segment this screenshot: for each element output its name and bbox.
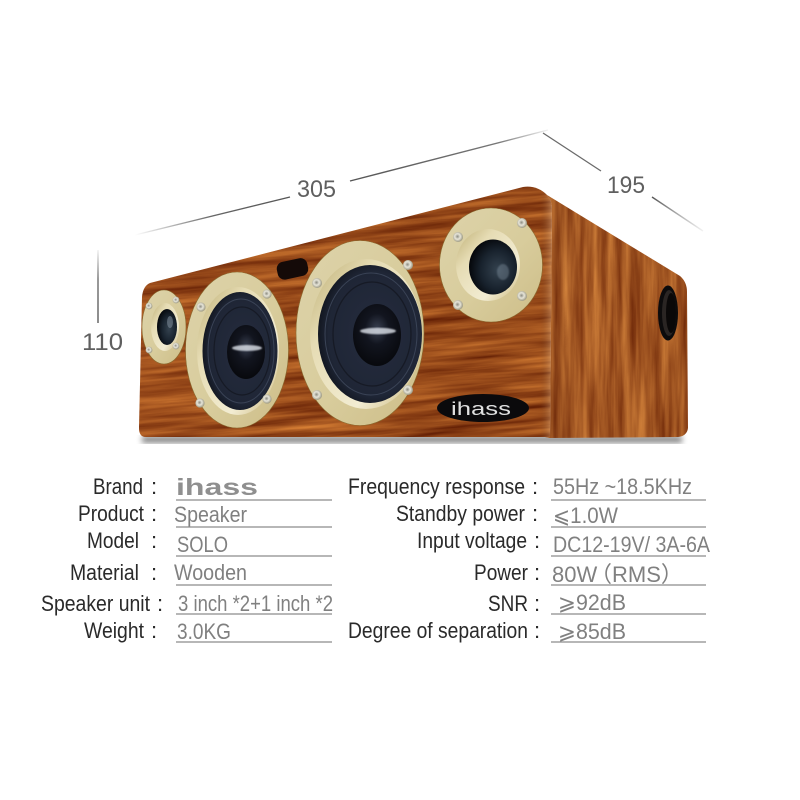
spec: frequency response (348, 474, 706, 500)
spec: power: : (534, 560, 540, 585)
dimension: height 110: 110 (82, 329, 123, 356)
spec: product: Speaker (174, 502, 247, 527)
spec: material: Material (70, 560, 139, 585)
dimension: depth 195: 195 (607, 172, 645, 199)
spec: standby power: ⩽1.0W (553, 503, 618, 528)
spec: input voltage: Input voltage (417, 528, 527, 553)
spec: product: Product (78, 501, 144, 526)
floor shadow (142, 436, 682, 443)
spec table: left column (41, 474, 333, 644)
spec: speaker unit: 3 inch *2+1 inch *2 (178, 591, 333, 616)
front slot (275, 257, 310, 281)
spec: weight (84, 618, 332, 644)
spec: product: : (151, 501, 157, 526)
cabinet front panel (139, 186, 552, 437)
ihass badge: ihass (451, 399, 511, 419)
spec: material (70, 560, 332, 585)
spec: product (78, 501, 332, 527)
left mid-range driver (186, 272, 288, 428)
spec: power (474, 560, 706, 587)
spec: frequency response: 55Hz ~18.5KHz (553, 474, 692, 499)
spec: brand: ihass (176, 474, 258, 500)
small left tweeter (142, 290, 186, 364)
spec: SNR: SNR (488, 591, 528, 616)
spec: standby power: Standby power (396, 501, 525, 526)
spec: SNR: ⩾92dB (558, 590, 626, 615)
spec: degree of separation (348, 618, 706, 644)
dimension: depth 195 (543, 133, 703, 231)
spec: input voltage (417, 528, 710, 557)
spec: input voltage: DC12-19V/ 3A-6A (553, 532, 710, 557)
spec: standby power: : (532, 501, 538, 526)
spec: speaker unit: : (157, 591, 163, 616)
spec: weight: Weight (84, 618, 144, 643)
spec: model: Model (87, 528, 139, 553)
spec: SNR (488, 590, 706, 616)
right tweeter (440, 208, 542, 322)
speaker photo illustration (138, 186, 688, 444)
spec: model: : (151, 528, 157, 553)
center mid-range driver (296, 240, 424, 426)
spec: weight: 3.0KG (177, 619, 231, 644)
dimension: height 110 (82, 250, 123, 356)
spec: model: SOLO (177, 532, 228, 557)
spec: power: （RMS） (590, 562, 683, 587)
spec: material: Wooden (174, 560, 247, 585)
spec: frequency response: Frequency response (348, 474, 525, 499)
spec: SNR: : (534, 591, 540, 616)
spec table: right column (348, 474, 710, 644)
spec: standby power (396, 501, 706, 528)
cabinet side panel (545, 195, 688, 438)
dimension: width 305 (135, 130, 548, 235)
spec: model (87, 528, 332, 557)
spec: input voltage: : (534, 528, 540, 553)
spec: frequency response: : (532, 474, 538, 499)
spec: brand: Brand (93, 474, 143, 499)
spec: degree of separation: ⩾85dB (558, 619, 626, 644)
spec: brand: : (151, 474, 157, 499)
dimension: width 305: 305 (297, 176, 336, 203)
spec: degree of separation: : (534, 618, 540, 643)
spec: power: Power (474, 560, 528, 585)
spec: degree of separation: Degree of separation (348, 618, 528, 643)
spec: weight: : (151, 618, 157, 643)
spec: speaker unit: Speaker unit (41, 591, 150, 616)
spec: brand (93, 474, 332, 500)
spec: material: : (151, 560, 157, 585)
spec: speaker unit (41, 591, 333, 616)
side bass port (658, 286, 678, 340)
spec: power: 80W (552, 562, 597, 587)
ihass badge (437, 394, 529, 422)
